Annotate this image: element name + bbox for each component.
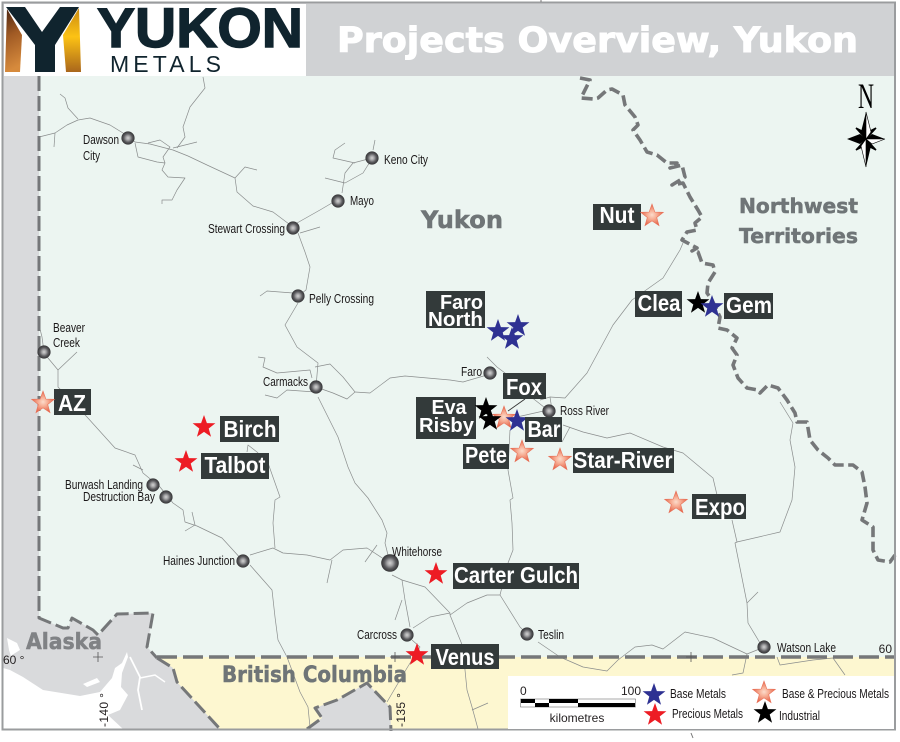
logo mark — [5, 7, 81, 72]
project: Carter Gulch: Carter Gulch — [454, 562, 578, 588]
region label: Northwest Territories: Northwest — [739, 194, 858, 218]
project: Nut: Nut — [600, 202, 635, 228]
project: Faro North — [426, 291, 529, 349]
project: Talbot: Talbot — [204, 452, 266, 478]
legend: industrial: Industrial — [779, 708, 820, 723]
project: Birch — [193, 415, 279, 442]
British Columbia land — [157, 657, 895, 729]
coordinate labels: -140 ° — [97, 693, 111, 727]
city: Stewart Crossing: Stewart Crossing — [208, 221, 285, 236]
city: Haines Junction: Haines Junction — [163, 553, 235, 568]
project: Fox — [493, 373, 546, 428]
region label: Northwest Territories: Territories — [739, 224, 858, 248]
project: Venus — [406, 643, 499, 670]
legend: base metals: Base Metals — [670, 686, 726, 701]
city: Pelly Crossing — [291, 289, 374, 306]
city: Mayo: Mayo — [350, 193, 374, 208]
Yukon and Northwest Territories land — [39, 76, 895, 657]
project: Bar — [506, 409, 562, 442]
legend: precious metals — [644, 703, 743, 725]
logo panel — [4, 0, 306, 77]
city: Teslin — [520, 627, 564, 642]
scale bar: 100 — [621, 684, 641, 698]
city: Whitehorse — [381, 544, 442, 572]
project: Birch: Birch — [224, 416, 276, 442]
city: Beaver Creek: Creek — [53, 335, 80, 350]
city: Teslin: Teslin — [538, 627, 564, 642]
region label: Alaska: Alaska — [26, 630, 102, 655]
project: Pete: Pete — [465, 442, 507, 468]
project: AZ — [32, 389, 91, 416]
city: Carmacks: Carmacks — [263, 374, 308, 389]
project: Faro North: Faro — [440, 292, 483, 314]
city: Carcross: Carcross — [357, 627, 397, 642]
Alaska coastal water — [3, 638, 165, 729]
legend: industrial — [754, 701, 820, 723]
compass rose: N — [858, 76, 874, 116]
project: Star-River: Star-River — [574, 447, 673, 473]
coordinate labels: 60 ° — [3, 653, 25, 667]
project: Bar: Bar — [528, 416, 561, 442]
legend: base metals — [643, 683, 726, 705]
project: Gem: Gem — [726, 292, 772, 318]
project: Fox: Fox — [506, 374, 542, 400]
scale bar: kilometres — [550, 711, 604, 725]
road network — [39, 77, 845, 729]
project: Clea: Clea — [638, 290, 681, 316]
scale bar — [520, 684, 641, 725]
city: Watson Lake: Watson Lake — [777, 640, 836, 655]
title banner — [306, 4, 894, 76]
region label: Yukon: Yukon — [420, 206, 503, 234]
city: Dawson City: Dawson — [83, 132, 119, 147]
city: Dawson City — [83, 131, 135, 163]
city: Ross River: Ross River — [560, 403, 610, 418]
city: Beaver Creek: Beaver — [53, 320, 86, 335]
project: Expo: Expo — [695, 494, 745, 520]
city: Burwash Landing: Burwash Landing — [65, 477, 143, 492]
city: Beaver Creek — [37, 320, 86, 359]
project: Nut — [593, 202, 663, 230]
project: Clea — [635, 290, 709, 317]
city: Destruction Bay: Destruction Bay — [83, 489, 155, 504]
project: Gem — [701, 292, 773, 319]
city: Dawson City: City — [83, 148, 100, 163]
project: Eva and Risby: Eva — [432, 397, 467, 419]
legend: precious metals: Precious Metals — [672, 706, 743, 721]
project: Talbot — [175, 450, 269, 479]
city: Ross River — [542, 403, 610, 418]
city: Keno City: Keno City — [384, 152, 428, 167]
project: AZ: AZ — [58, 390, 86, 416]
legend panel — [508, 676, 894, 729]
region label: British Columbia: British Columbia — [222, 663, 407, 688]
coordinate labels: -135 ° — [394, 693, 408, 727]
project: Faro North: North — [428, 309, 483, 331]
city: Mayo — [331, 193, 374, 208]
project: Eva and Risby: Risby — [419, 415, 475, 437]
project: Venus: Venus — [436, 644, 494, 670]
city: Faro: Faro — [461, 364, 482, 379]
compass rose — [847, 76, 885, 167]
city: Keno City — [365, 151, 428, 167]
logo panel: METALS — [110, 51, 221, 77]
legend: base and precious metals — [753, 681, 889, 703]
region label: Northwest Territories — [739, 194, 858, 248]
coordinate labels: 60 — [879, 642, 892, 656]
city: Watson Lake — [757, 640, 836, 655]
city: Pelly Crossing: Pelly Crossing — [309, 291, 374, 306]
project: Expo — [665, 491, 746, 520]
title banner: Projects Overview, Yukon — [337, 21, 858, 61]
city: Whitehorse: Whitehorse — [392, 544, 442, 559]
coordinate labels — [3, 642, 892, 727]
project: Pete — [463, 440, 533, 469]
graticule crosses — [93, 652, 696, 662]
project: Eva and Risby — [416, 397, 501, 439]
scale bar: 0 — [520, 684, 527, 698]
